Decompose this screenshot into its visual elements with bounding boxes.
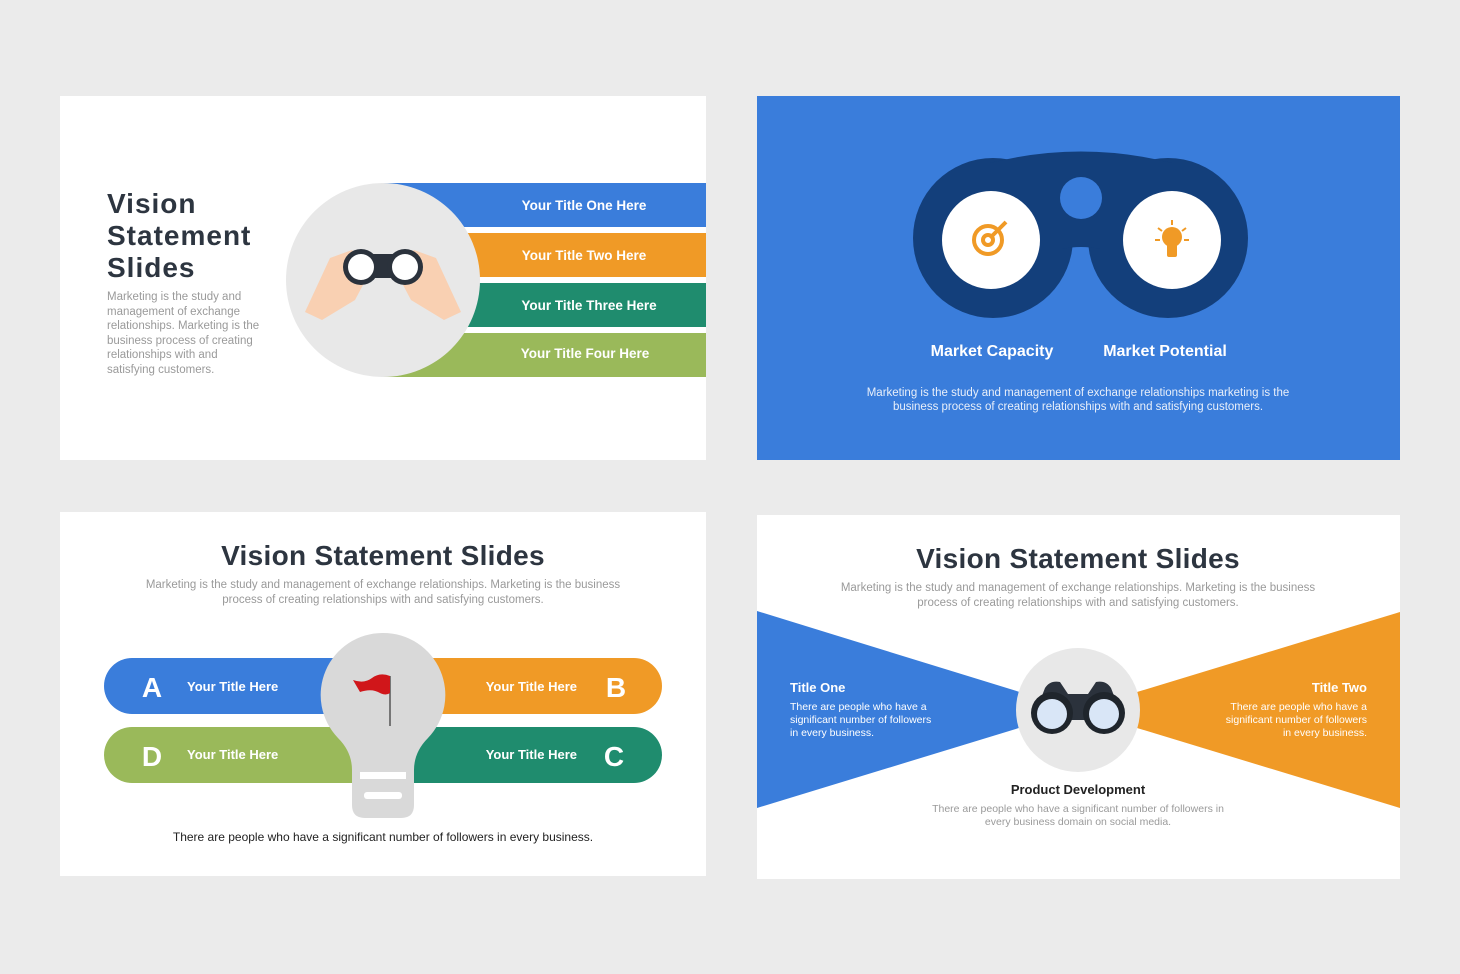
text block: footer: There are people who have a significant number of followers in every business. (173, 830, 593, 844)
bar: title three: Your Title Three Here (521, 298, 657, 313)
text block: title two: in every business. (1283, 727, 1367, 739)
pill: D: Your Title Here (187, 747, 278, 762)
icon: target (974, 222, 1006, 254)
text block: description: management of exchange (107, 306, 240, 318)
text block: description: relationships. Marketing is the (107, 320, 259, 332)
pill: C: Your Title Here (486, 747, 577, 762)
shape: blue wedge (757, 611, 1078, 808)
text block: subtitle: process of creating relationships with and satisfying customers. (917, 597, 1239, 609)
text block: description: business process of creating (107, 335, 253, 347)
text block: subtitle: process of creating relationships with and satisfying customers. (222, 594, 544, 606)
text block: description (107, 291, 259, 376)
icon: big binoculars (913, 152, 1248, 318)
bar: title one (383, 183, 706, 227)
panel: slide 3 bulb (60, 512, 706, 876)
text block: title two: There are people who have a (1230, 701, 1367, 713)
pill: A: A (142, 672, 162, 703)
heading: Vision Statement Slides (916, 543, 1240, 574)
text block: title one: in every business. (790, 727, 874, 739)
icon: binoculars circle (1016, 648, 1140, 772)
heading: vision statement slides: Slides (107, 252, 195, 283)
pill: A (104, 658, 394, 714)
text block: product development (932, 782, 1224, 828)
text block: subtitle (841, 582, 1315, 609)
bar: title one: Your Title One Here (522, 198, 647, 213)
pill: D: D (142, 741, 162, 772)
text block: title one (790, 680, 931, 739)
bar: title four (383, 333, 706, 377)
pill: B (372, 658, 662, 714)
label: market potential: Market Potential (1103, 343, 1227, 360)
text block: title one: Title One (790, 680, 845, 695)
text block: product development: every business domain on social media. (985, 816, 1171, 828)
pill: C: C (604, 741, 624, 772)
pill: C (372, 727, 662, 783)
text block: subtitle: Marketing is the study and management of exchange relationships. Marketing is the business (841, 582, 1315, 594)
icon: light bulb with flag (321, 633, 445, 818)
text block: description: Marketing is the study and management of exchange relationships marketing is the (867, 387, 1289, 399)
text block: subtitle: Marketing is the study and management of exchange relationships. Marketing is the business (146, 579, 620, 591)
pill: D (104, 727, 394, 783)
heading: vision statement slides: Statement (107, 220, 251, 251)
pill: B: B (606, 672, 626, 703)
bar: title two: Your Title Two Here (522, 248, 647, 263)
heading: Vision Statement Slides (221, 540, 545, 571)
panel: slide 2 binoculars (757, 96, 1400, 460)
text block: description: satisfying customers. (107, 364, 214, 376)
shape: orange wedge (1078, 612, 1400, 808)
icon: bulb (1155, 220, 1189, 257)
heading: vision statement slides: Vision (107, 188, 197, 219)
text block: description (867, 387, 1289, 413)
text block: product development: Product Development (1011, 782, 1146, 797)
text block: product development: There are people who have a significant number of followers in (932, 803, 1224, 815)
text block: description: business process of creating relationships with and satisfying customers. (893, 401, 1263, 413)
icon: hands with binoculars (286, 183, 480, 377)
pill: A: Your Title Here (187, 679, 278, 694)
text block: title two: Title Two (1312, 680, 1367, 695)
bar: title four: Your Title Four Here (521, 346, 650, 361)
text block: title two: significant number of followers (1226, 714, 1367, 726)
panel: slide 1 four titles (60, 96, 706, 460)
text block: title one: significant number of followers (790, 714, 931, 726)
pill: B: Your Title Here (486, 679, 577, 694)
panel: slide 4 bow-tie (757, 515, 1400, 879)
label: market capacity: Market Capacity (931, 343, 1053, 360)
text block: subtitle (146, 579, 620, 606)
text block: description: Marketing is the study and (107, 291, 241, 303)
bar: title three (383, 283, 706, 327)
bar: title two (383, 233, 706, 277)
heading: vision statement slides (107, 188, 251, 283)
text block: title two (1226, 680, 1367, 739)
text block: description: relationships with and (107, 349, 218, 361)
text block: title one: There are people who have a (790, 701, 927, 713)
